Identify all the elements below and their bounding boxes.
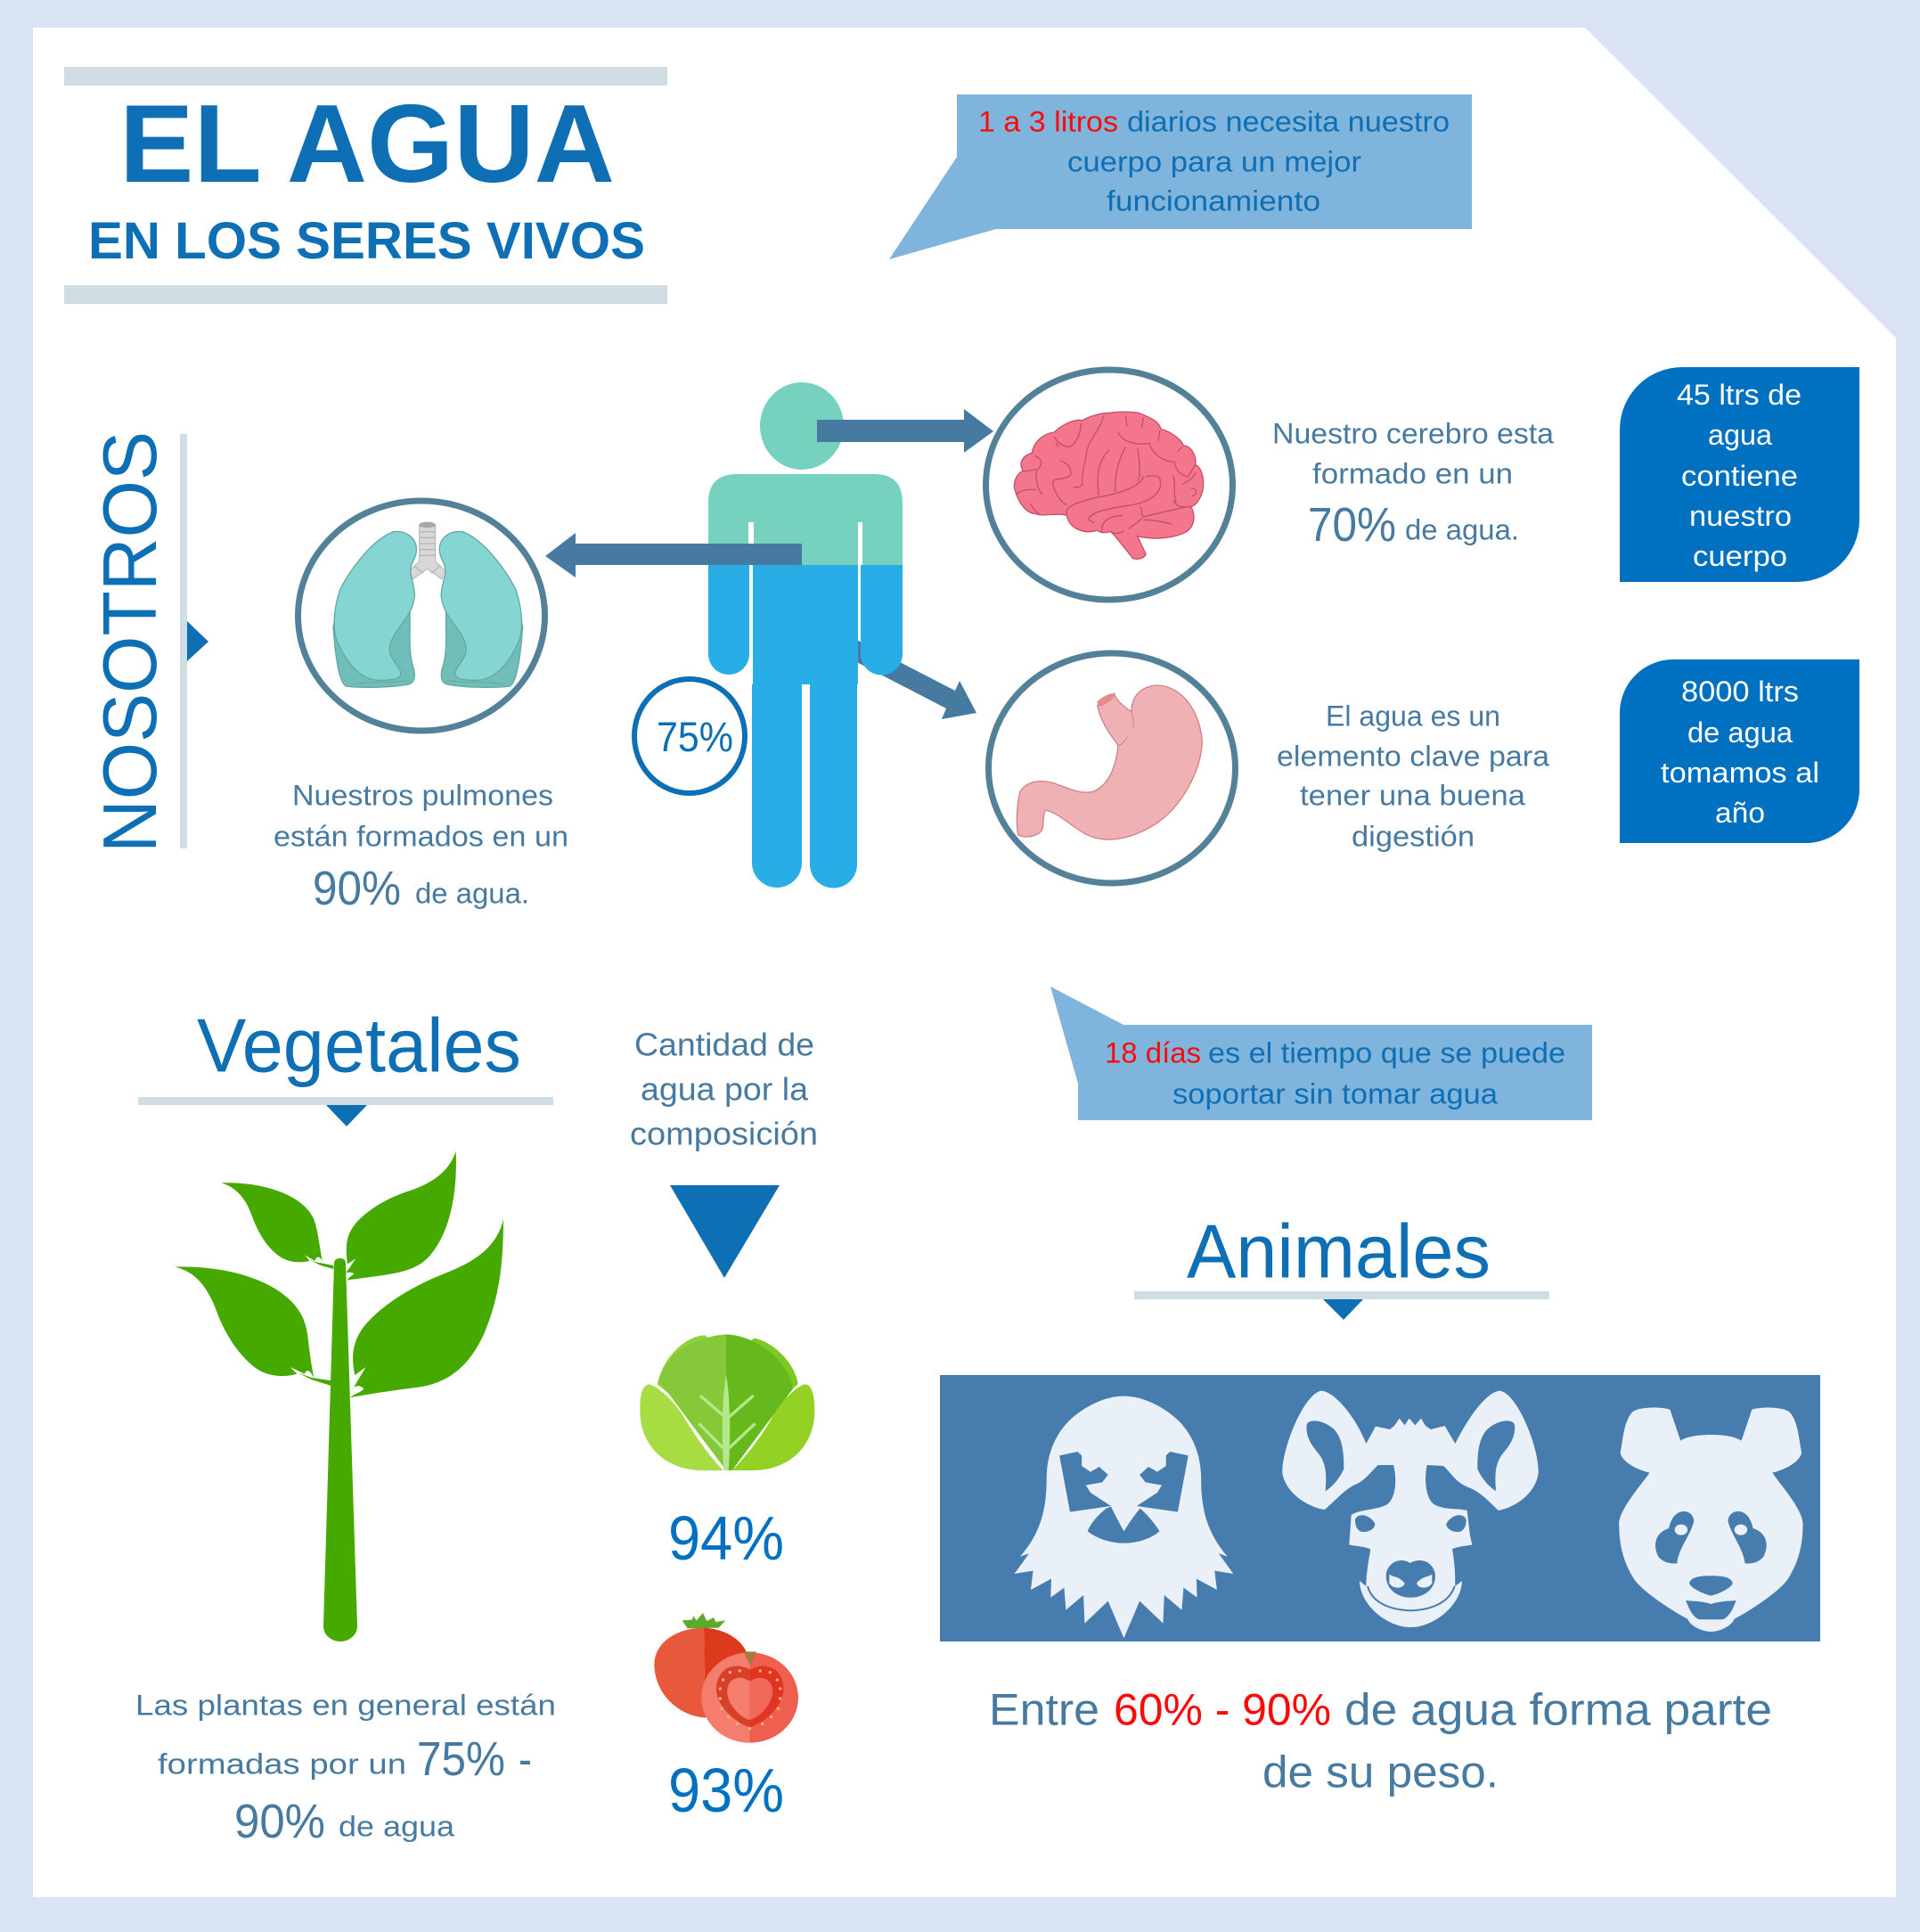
box: 45 litres — [1620, 367, 1859, 582]
box: 45 litres: contiene — [1681, 460, 1798, 492]
box: 45 litres: 45 ltrs de — [1677, 379, 1802, 411]
text: plants: - — [519, 1732, 532, 1786]
text: digestion: elemento clave para — [1277, 740, 1549, 772]
box: 8000 litres: de agua — [1687, 716, 1793, 749]
body water blue — [708, 565, 749, 675]
heading: Animales — [1134, 1210, 1549, 1320]
icon: lettuce — [640, 1334, 814, 1470]
box: 8000 litres: año — [1715, 797, 1765, 829]
callout: daily litres: diarios necesita nuestro — [1127, 105, 1450, 137]
heading: Vegetales — [138, 1003, 553, 1126]
text: lungs: están formados en un — [274, 820, 568, 852]
text: lungs: de agua. — [415, 877, 529, 909]
text: digestion — [1277, 700, 1549, 852]
text: brain: Nuestro cerebro esta — [1272, 417, 1554, 449]
text: composition heading: agua por la — [641, 1071, 809, 1107]
arrow: down triangle — [670, 1185, 780, 1278]
title block: EL AGUA — [119, 83, 615, 206]
text: plants: formadas por un — [158, 1748, 406, 1781]
text: composition heading: composición — [630, 1116, 818, 1151]
heading: NOSOTROS — [88, 431, 208, 853]
text: lungs: Nuestros pulmones — [292, 779, 553, 811]
callout: 18 days: 18 días — [1105, 1037, 1201, 1069]
text: composition heading — [630, 1027, 818, 1151]
text: brain: 70% — [1308, 498, 1396, 552]
icon: eagle — [1015, 1396, 1233, 1638]
text: brain: formado en un — [1312, 458, 1513, 490]
text: plants: 75% — [417, 1732, 505, 1786]
box: 45 litres: agua — [1708, 419, 1772, 451]
heading: NOSOTROS: NOSOTROS — [88, 431, 173, 853]
callout: 18 days — [1050, 986, 1592, 1120]
head — [760, 382, 844, 470]
arrow: to lungs — [545, 533, 802, 577]
box: 8000 litres: tomamos al — [1661, 757, 1819, 789]
callout: daily litres: 1 a 3 litros — [978, 105, 1118, 137]
callout: 18 days: es el tiempo que se puede — [1208, 1037, 1565, 1069]
badge: 75%: 75% — [657, 713, 733, 760]
text: plants: Las plantas en general están — [135, 1690, 556, 1722]
text: plants: 90% — [234, 1795, 325, 1848]
box: 45 litres: nuestro — [1689, 500, 1792, 532]
title block — [64, 67, 667, 304]
icon: brain — [985, 370, 1233, 600]
text: digestion: digestión — [1352, 820, 1475, 852]
callout: daily litres — [889, 94, 1472, 259]
text: animals: de agua forma parte — [1344, 1684, 1772, 1734]
box: 8000 litres: 8000 ltrs — [1681, 675, 1799, 708]
text: brain: de agua. — [1405, 513, 1519, 545]
text: digestion: tener una buena — [1300, 779, 1525, 811]
icon: stomach — [989, 653, 1235, 883]
arrow: to stomach — [846, 634, 976, 719]
callout: 18 days: soportar sin tomar agua — [1172, 1078, 1498, 1110]
callout: daily litres: cuerpo para un mejor — [1067, 146, 1361, 178]
text: lungs: 90% — [313, 862, 401, 915]
heading: Vegetales: Vegetales — [197, 1003, 521, 1089]
icon: donkey — [1282, 1391, 1539, 1627]
torso green — [708, 474, 903, 565]
box: 45 litres: cuerpo — [1693, 540, 1787, 572]
callout: daily litres: funcionamiento — [1107, 185, 1320, 217]
icon: lungs — [298, 501, 545, 731]
icon: tomato — [654, 1613, 798, 1743]
icon: panda — [1619, 1407, 1803, 1632]
text: plants: de agua — [339, 1811, 454, 1843]
box: 8000 litres — [1620, 659, 1859, 843]
badge: 75% — [634, 679, 745, 793]
text: plants — [135, 1690, 556, 1848]
title block: EN LOS SERES VIVOS — [88, 212, 645, 270]
text: brain — [1272, 417, 1554, 552]
heading: Animales: Animales — [1187, 1210, 1491, 1294]
icon: plant — [175, 1151, 503, 1641]
text: digestion: El agua es un — [1326, 700, 1500, 733]
text: animals: 60% - 90% — [1114, 1684, 1331, 1734]
arrow: to brain — [817, 409, 993, 453]
text: animals: Entre — [989, 1684, 1099, 1734]
human figure — [708, 382, 903, 888]
text: lungs — [274, 779, 568, 915]
panel: animals — [940, 1375, 1820, 1641]
value: 93%: 93% — [668, 1756, 784, 1825]
value: 94%: 94% — [668, 1503, 784, 1573]
text: composition heading: Cantidad de — [634, 1027, 814, 1062]
text: animals — [989, 1684, 1772, 1797]
text: animals: de su peso. — [1262, 1747, 1499, 1797]
